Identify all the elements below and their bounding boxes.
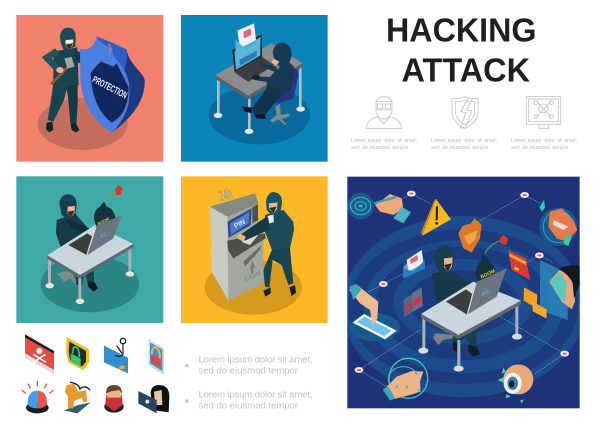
text block: second caption: Lorem ipsum dolor sit amet, — [431, 138, 497, 144]
bomb: BOOM — [480, 268, 496, 280]
desk and laptop: PC — [481, 289, 491, 298]
panel: password theft at desk — [181, 15, 328, 162]
desk and laptop — [418, 268, 522, 372]
line icon: masked hacker — [367, 97, 401, 129]
title: ATTACK — [402, 52, 530, 88]
icon: face recognition — [540, 260, 580, 320]
icon: gold shield with padlock — [66, 337, 89, 370]
seated hacker on chair — [242, 43, 298, 125]
text block: second caption — [431, 138, 497, 151]
text block: first bullet: Lorem ipsum dolor sit amet, — [198, 355, 312, 366]
ATM machine — [210, 185, 266, 301]
icon: tablet with padlock — [149, 339, 164, 375]
hacker with hammer — [42, 28, 102, 133]
icon: trojan horse — [64, 382, 91, 413]
icon: monitor with skull — [25, 334, 54, 374]
bomb — [476, 235, 508, 285]
panel: bomb and laptop — [16, 176, 163, 323]
text block: first caption — [351, 138, 417, 151]
panel: hacking attack overview — [342, 177, 585, 408]
shield with protection label — [80, 37, 145, 133]
icon: hand scan — [383, 358, 428, 401]
icon: eye scan — [498, 364, 533, 403]
concentric rings — [342, 216, 585, 397]
icon: orange shield — [458, 218, 482, 253]
ATM machine: PIN — [233, 219, 247, 230]
icon: lips and voice recognition — [539, 200, 577, 246]
icon: alarm siren — [22, 381, 54, 413]
icon: warning triangle — [421, 199, 451, 236]
text block: third caption: sed do eiusmod tempor — [511, 145, 569, 151]
bomb: BOOM — [97, 216, 111, 226]
icon: orange folders — [524, 287, 547, 319]
ATM machine: CASH — [244, 271, 262, 283]
icon: hand on smartphone — [349, 284, 400, 341]
desk and laptop: PC — [100, 231, 109, 240]
text block: first bullet — [185, 355, 312, 377]
panel: ATM fraud — [181, 176, 328, 323]
text block: second caption: sed do eiusmod tempor — [431, 145, 489, 151]
hacker at ATM — [237, 192, 296, 297]
text block: second bullet: Lorem ipsum dolor sit amet, — [198, 390, 312, 401]
line icon: cracked shield — [452, 97, 478, 129]
icon: bank cards — [508, 250, 530, 280]
panel: protection shield — [16, 15, 163, 162]
icon: grey security tablets — [403, 287, 423, 318]
line icon: monitor with skull — [526, 97, 561, 128]
desk — [214, 43, 305, 134]
desk and laptop — [45, 215, 134, 304]
icon: fingerprint hand with pen — [347, 193, 411, 223]
shield with protection label: PROTECTION — [91, 74, 129, 101]
icon: credit card on hook — [104, 338, 128, 373]
text block: first caption: sed do eiusmod tempor — [351, 145, 409, 151]
text block: third caption — [511, 138, 577, 151]
seated hacker — [56, 194, 98, 292]
title: HACKING — [386, 12, 536, 49]
text block: second bullet: sed do eiusmod tempor — [198, 401, 299, 412]
bomb — [94, 185, 123, 233]
laptop and password envelope — [232, 23, 274, 82]
title — [386, 12, 536, 89]
text block: second bullet — [185, 390, 312, 412]
text block: first bullet: sed do eiusmod tempor — [198, 366, 299, 377]
network connectors — [359, 194, 565, 387]
network nodes — [355, 191, 569, 373]
text block: third caption: Lorem ipsum dolor sit amet, — [511, 138, 577, 144]
text block: first caption: Lorem ipsum dolor sit amet, — [351, 138, 417, 144]
ATM machine: 24h — [217, 185, 235, 205]
icon: person with red bandana — [104, 385, 124, 413]
hacker at laptop — [432, 245, 480, 357]
icon: woman hacker with laptop — [138, 385, 169, 413]
icon: envelope — [403, 250, 425, 278]
